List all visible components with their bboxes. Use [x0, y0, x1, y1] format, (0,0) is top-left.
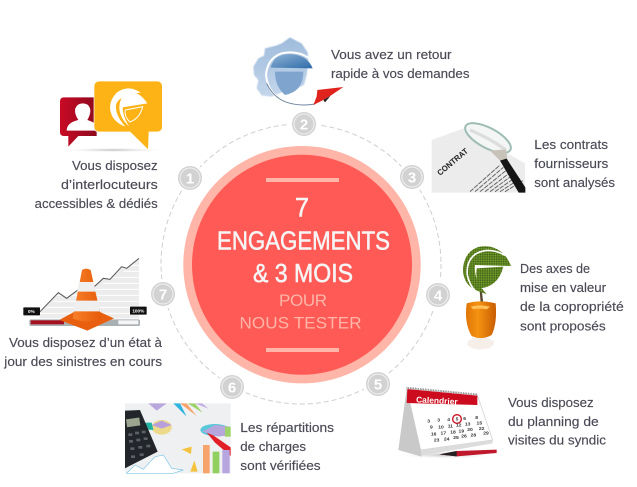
text: interlocuteurs: Vous disposez	[72, 158, 158, 173]
icon: calendar and pen: 5	[456, 417, 459, 423]
heading: 7 engagements	[217, 192, 390, 288]
icon: calendar and pen: 8	[475, 415, 478, 421]
text: sinistres: jour des sinistres en cours	[3, 354, 163, 369]
badge 6	[217, 372, 247, 402]
text: contrats: sont analysés	[534, 175, 615, 190]
icon: speech bubbles	[58, 81, 168, 152]
icon: traffic cone and chart: 100%	[132, 308, 145, 313]
icon: contract with magnifier: CONTRAT	[436, 147, 470, 178]
text: retour rapide	[331, 47, 470, 81]
text: planning: Vous disposez	[508, 395, 594, 410]
icon: calendar and pen: 28	[471, 433, 476, 439]
text: répartitions: de charges	[240, 439, 307, 454]
icon: traffic cone and chart	[23, 258, 147, 331]
text: planning: du planning de	[508, 414, 599, 429]
icon: calendar and pen: 18	[450, 429, 456, 435]
text: interlocuteurs: d’interlocuteurs	[61, 177, 158, 192]
text: sinistres: Vous disposez d’un état à	[9, 335, 163, 350]
icon: calendar and pen: 12	[456, 422, 462, 428]
icon: plant in pot	[463, 246, 511, 349]
text: répartitions	[240, 420, 335, 473]
badge 1: 1	[186, 170, 194, 188]
icon: cloud with paper plane	[253, 37, 343, 105]
text: axes de mise en valeur: Des axes de	[520, 261, 590, 276]
text: contrats	[534, 137, 615, 190]
badge 6: 6	[228, 380, 236, 396]
text: axes de mise en valeur	[520, 261, 624, 334]
badge 3	[397, 162, 427, 192]
icon: calendar and pen: 11	[448, 423, 453, 429]
text: axes de mise en valeur: sont proposés	[520, 318, 606, 334]
icon: calendar and pen: 19	[459, 428, 464, 434]
text: contrats: Les contrats	[534, 137, 609, 152]
badge 4	[423, 280, 453, 310]
icon: traffic cone and chart: 0%	[28, 309, 36, 314]
icon: calendar and pen: 9	[430, 425, 433, 431]
text: axes de mise en valeur: de la copropriété	[520, 299, 624, 314]
text: répartitions: sont vérifiées	[240, 458, 321, 473]
icon: contract with magnifier	[432, 117, 525, 193]
badge 3: 3	[408, 170, 416, 186]
badge 7: 7	[159, 286, 167, 304]
icon: calendar and pen: 3	[427, 419, 430, 425]
icon: calendar and pen: 6	[463, 416, 466, 422]
badge 5	[363, 369, 393, 399]
icon: charts and calculator photo	[125, 403, 231, 473]
icon: calendar and pen	[397, 388, 497, 459]
icon: calendar and pen: 17	[441, 430, 446, 436]
badge 1	[175, 163, 205, 193]
icon: calendar and pen: 13	[465, 422, 471, 428]
icon: calendar and pen: 26	[461, 434, 467, 440]
subheading: pour nous tester: POUR	[279, 291, 327, 310]
text: retour rapide: rapide à vos demandes	[331, 66, 470, 81]
text: sinistres	[3, 335, 163, 369]
dashed ring	[161, 124, 441, 404]
icon: calendar and pen: 10	[438, 424, 444, 430]
icon: calendar and pen: 23	[434, 438, 440, 444]
text: répartitions: Les répartitions	[240, 420, 335, 435]
text: axes de mise en valeur: mise en valeur	[520, 280, 607, 295]
icon: calendar and pen: 24	[444, 436, 450, 442]
subheading: pour nous tester: NOUS TESTER	[240, 314, 362, 333]
heading: 7 engagements: & 3 MOIS	[253, 258, 353, 288]
central circle	[183, 146, 421, 383]
subheading: pour nous tester	[240, 291, 362, 333]
badge 2	[289, 109, 319, 139]
badge 4: 4	[434, 288, 443, 304]
icon: calendar and pen: 29	[483, 430, 489, 436]
icon: calendar and pen: 20	[467, 427, 473, 433]
heading: 7 engagements: 7	[295, 192, 309, 222]
icon: calendar and pen: 25	[453, 435, 459, 441]
text: planning: visites du syndic	[508, 432, 607, 448]
badge 2: 2	[300, 116, 308, 134]
badge 5: 5	[374, 376, 382, 394]
icon: calendar and pen: Calendrier	[416, 394, 459, 407]
text: interlocuteurs	[35, 158, 158, 211]
icon: calendar and pen: 15	[477, 421, 482, 427]
icon: calendar and pen: 16	[431, 431, 437, 437]
text: contrats: fournisseurs	[534, 156, 609, 171]
text: retour rapide: Vous avez un retour	[331, 47, 452, 62]
icon: calendar and pen: 22	[479, 426, 485, 432]
text: interlocuteurs: accessibles & dédiés	[35, 196, 158, 211]
icon: calendar and pen: 4	[447, 417, 450, 423]
icon: calendar and pen: 3	[437, 418, 440, 424]
badge 7	[148, 279, 178, 309]
heading: 7 engagements: ENGAGEMENTS	[217, 225, 390, 255]
text: planning	[508, 395, 607, 448]
